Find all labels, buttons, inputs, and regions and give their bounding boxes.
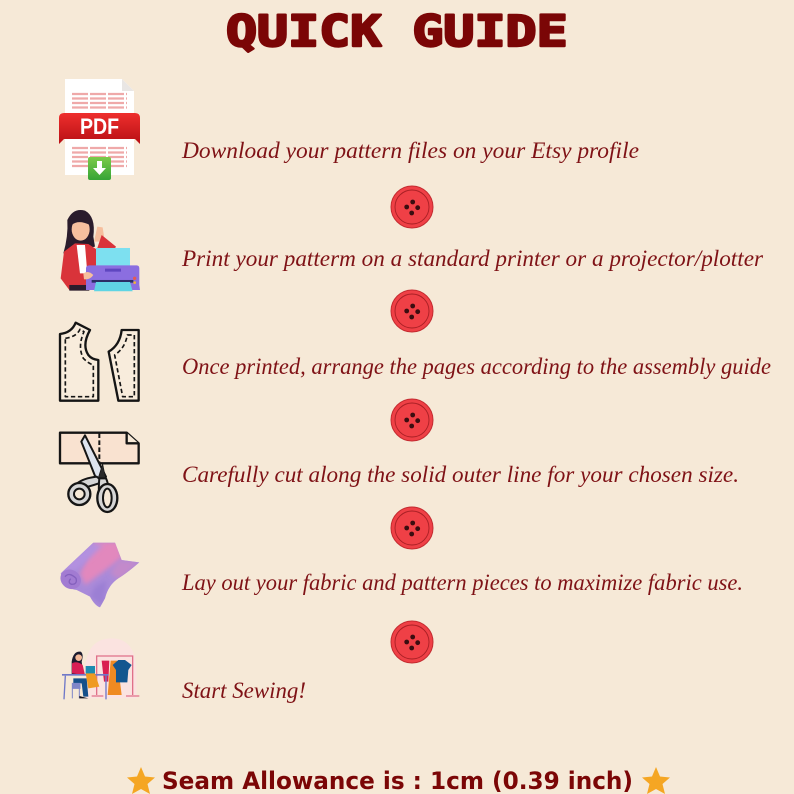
icon: PDF download: PDF: [80, 115, 119, 139]
step text 3: Once printed, arrange the pages according to the assembly guide: [182, 354, 771, 379]
step text 2: Print your patterm on a standard printer or a projector/plotter: [181, 246, 764, 271]
icon: PDF download: [59, 79, 140, 180]
title: QUICK GUIDE: [226, 7, 568, 57]
step text 5: Lay out your fabric and pattern pieces to maximize fabric use.: [181, 570, 743, 595]
icon: right star: [642, 767, 670, 794]
icon: left star: [127, 767, 155, 794]
icon: woman sewing with clothes rack: [62, 638, 139, 699]
step text 4: Carefully cut along the solid outer line for your chosen size.: [182, 462, 739, 487]
button 3: [391, 399, 433, 441]
button 5: [391, 621, 433, 663]
button 2: [391, 290, 433, 332]
button 1: [391, 186, 433, 228]
icon: fabric roll: [60, 542, 140, 608]
icon: sewing pattern pieces: [60, 323, 139, 401]
step text 1: Download your pattern files on your Etsy profile: [181, 138, 639, 163]
step text 6: Start Sewing!: [182, 678, 306, 703]
seam allowance note: [127, 767, 670, 794]
button 4: [391, 507, 433, 549]
icon: woman with printer: [61, 210, 140, 291]
icon: scissors cutting paper: [60, 433, 139, 512]
